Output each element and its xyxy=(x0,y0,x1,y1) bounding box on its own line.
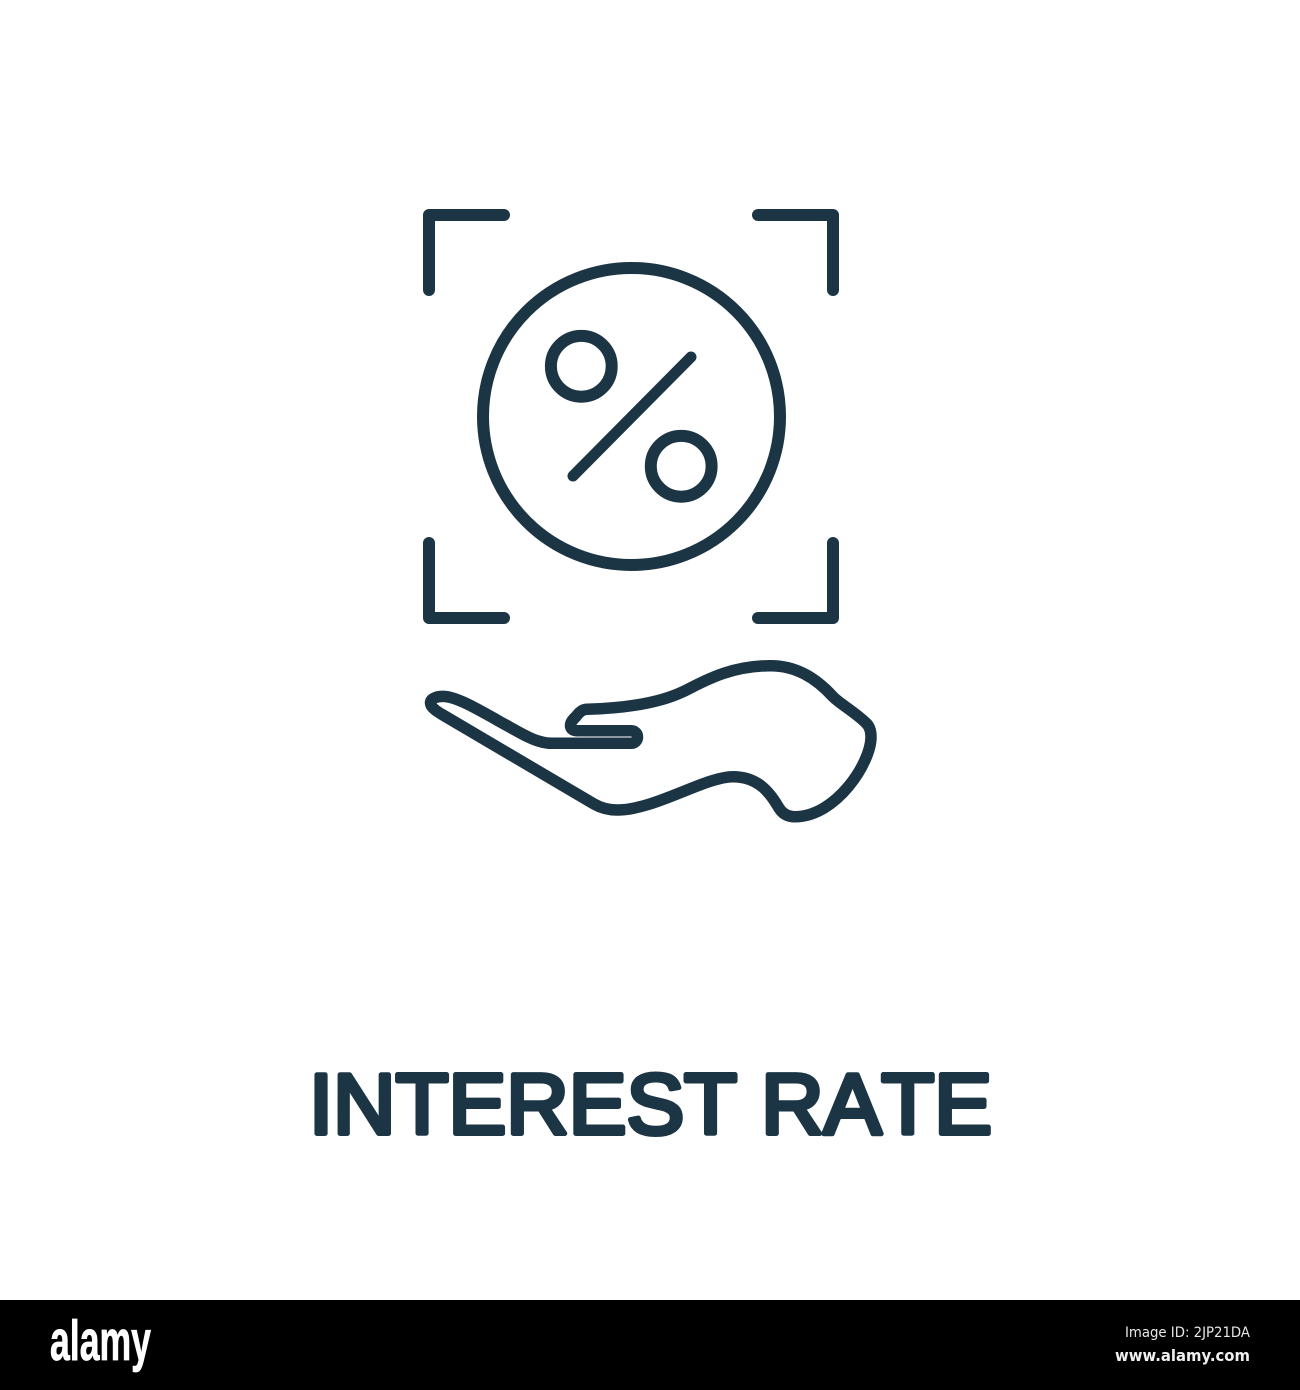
icon: percent coin xyxy=(483,268,780,565)
footer image id: Image ID: 2JP21DA xyxy=(1125,1325,1250,1341)
title: INTEREST RATE xyxy=(309,1058,992,1152)
footer website: www.alamy.com xyxy=(1115,1346,1250,1365)
icon: open hand xyxy=(430,666,871,817)
footer bar xyxy=(0,1300,1300,1390)
icon: interest rate xyxy=(429,215,871,817)
footer logo: alamy: alamy xyxy=(50,1309,151,1373)
icon: focus frame corners xyxy=(429,215,833,618)
